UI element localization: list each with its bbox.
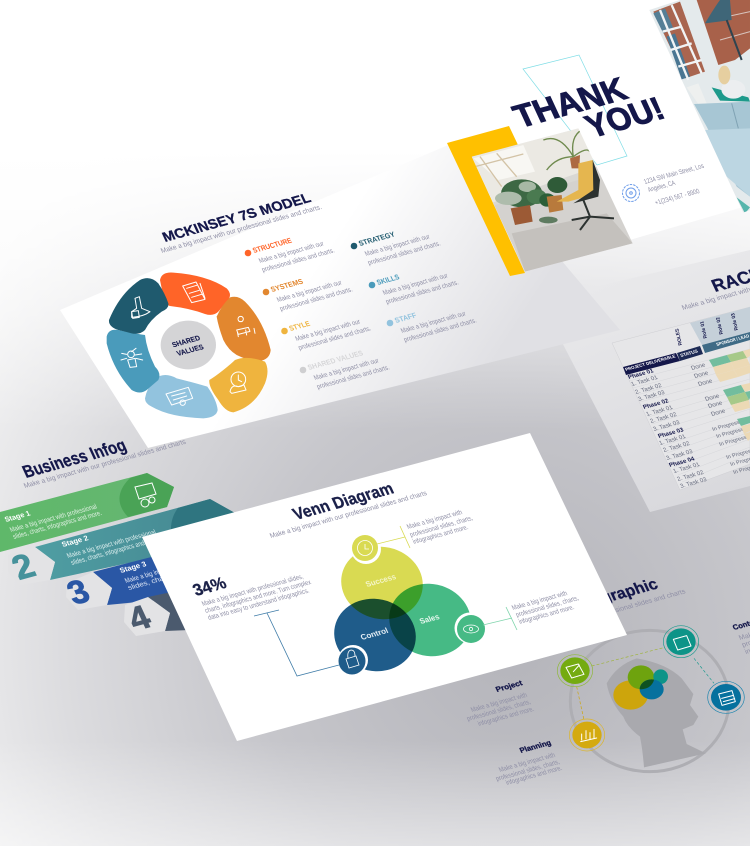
- text: project description: [466, 692, 536, 728]
- heading: infographic: Infographic: [570, 576, 661, 615]
- heading: thank you: YOU!: [579, 90, 670, 144]
- stage 2 bar: 2: [6, 547, 41, 587]
- heading: thank you: THANK: [507, 70, 633, 134]
- text: sales description: professional slides, charts,: [515, 595, 580, 619]
- table: Phase 03: [657, 427, 685, 440]
- table: Phase 01: [627, 368, 655, 381]
- icon: clock: [351, 534, 381, 564]
- node: teal content: [663, 626, 699, 658]
- label: success: Success: [364, 572, 398, 589]
- panel: RACI slide: [540, 250, 750, 512]
- item: skills: professional slides and charts.: [385, 280, 460, 306]
- petal: style: [209, 358, 267, 412]
- subtitle: business infographic: Make a big impact with our professional slides and charts: [23, 439, 188, 490]
- table: Done: [704, 393, 721, 403]
- table: 1. Task 01: [645, 405, 675, 418]
- contact details: +1(234) 567 - 8900: [654, 188, 701, 207]
- stage 2 bar: [6, 499, 235, 587]
- item: shared values: Make a big impact with our: [313, 358, 381, 382]
- item: systems: professional slides and charts.: [279, 287, 354, 313]
- stage 3 bar: 3: [61, 573, 96, 612]
- item: skills: SKILLS: [375, 273, 401, 287]
- table: In Progress: [718, 435, 748, 448]
- text: project description: professional slides, charts,: [466, 699, 532, 723]
- head diagram: [570, 630, 729, 772]
- petal: strategy: [109, 278, 168, 334]
- table: PROJECT DELIVERABLE: [624, 354, 676, 372]
- outline rectangle: [523, 55, 627, 165]
- node: blue: [708, 681, 744, 713]
- stage 1 bar: Stage 1: [3, 509, 32, 524]
- item: staff: Make a big impact with our: [400, 311, 468, 335]
- item: style: professional slides and charts.: [297, 326, 372, 352]
- item: shared values: [300, 349, 391, 391]
- table: In Progress: [715, 427, 745, 440]
- text: sales description: [511, 590, 580, 626]
- stat: 34%: 34%: [190, 574, 229, 600]
- item: strategy: Make a big impact with our: [364, 234, 432, 258]
- center: shared values: [161, 321, 216, 369]
- table: Role 03: [730, 312, 740, 331]
- label: sales: Sales: [418, 612, 442, 626]
- table: 2. Task 02: [662, 441, 692, 454]
- node: yellow planning: [569, 719, 605, 751]
- table: 1. Task 01: [658, 434, 688, 447]
- table: ROLES: [674, 327, 684, 346]
- stage 4 bar: [122, 588, 190, 638]
- table: Done: [693, 370, 710, 380]
- label: control: Control: [359, 626, 390, 642]
- item: staff: [387, 311, 478, 344]
- item: style: [281, 319, 372, 352]
- subtitle: venn: Make a big impact with our professional slides and charts: [269, 490, 429, 540]
- text: content description: [738, 620, 750, 656]
- item: structure: STRUCTURE: [251, 236, 293, 255]
- table: 1. Task 01: [672, 462, 702, 475]
- contact details: Angeles, CA: [647, 180, 677, 194]
- item: strategy: [351, 230, 442, 267]
- contact details: [643, 163, 706, 207]
- item: style: STYLE: [288, 319, 312, 333]
- text: stat description: Make a big impact with professional slides,: [201, 574, 305, 608]
- text: project description: Make a big impact with: [470, 692, 529, 714]
- contact details: 1234 SW Main Street, Los: [643, 163, 706, 186]
- stage 3 bar: slides, charts, infographics: [127, 561, 219, 592]
- petal: systems: [217, 297, 271, 361]
- venn circles: [327, 539, 478, 679]
- stage 2 bar: slides, charts, infographics and more.: [70, 536, 161, 567]
- table: 3. Task 03: [652, 420, 682, 433]
- item: skills: [369, 273, 460, 306]
- table: Phase 04: [668, 456, 696, 469]
- icon: lock: [338, 645, 368, 675]
- stage 1 bar: [0, 473, 174, 552]
- table: 2. Task 02: [676, 470, 706, 483]
- item: structure: Make a big impact with our: [258, 241, 326, 265]
- connector: success: [377, 526, 410, 548]
- center: shared values: VALUES: [175, 342, 205, 358]
- subtitle: infographic: Make a big impact with our professional slides and charts: [514, 588, 687, 642]
- text: stat description: [201, 574, 313, 622]
- item: systems: Make a big impact with our: [276, 280, 344, 304]
- text: sales description: infographics and more.: [518, 604, 576, 626]
- yellow frame: [447, 126, 525, 276]
- petal: structure: [160, 273, 230, 315]
- stage 2 bar: Make a big impact with professional: [66, 529, 158, 560]
- panel: thank you slide: [447, 0, 750, 276]
- item: staff: STAFF: [393, 311, 418, 325]
- text: success description: infographics and more.: [412, 524, 470, 546]
- panel: venn diagram slide: [142, 433, 627, 741]
- text: stat description: charts, infographics and more. Turn complex: [204, 579, 313, 615]
- heading: McKinsey 7S model: MCKINSEY 7S MODEL: [160, 189, 314, 245]
- connector: control: [254, 610, 339, 676]
- item: structure: [245, 236, 336, 274]
- table: Done: [697, 378, 714, 388]
- table: Done: [690, 362, 707, 372]
- text: planning description: infographics and more.: [505, 765, 564, 787]
- item: skills: Make a big impact with our: [382, 273, 450, 297]
- center: shared values: SHARED: [170, 333, 202, 349]
- panel: McKinsey 7S slide: [60, 140, 620, 448]
- table: Role 01: [699, 320, 709, 339]
- subtitle: RACI: Make a big impact with: [681, 287, 750, 312]
- text: success description: [406, 509, 474, 546]
- table: In Progress: [711, 420, 741, 433]
- icon: eye: [454, 612, 486, 644]
- stage 3 bar: Make a big impact with professional: [124, 554, 216, 585]
- item: strategy: STRATEGY: [357, 230, 396, 248]
- table: Phase 02: [642, 398, 670, 411]
- stage 3 bar: Stage 3: [118, 559, 148, 575]
- item: systems: SYSTEMS: [269, 277, 305, 294]
- table: 3. Task 03: [665, 449, 695, 462]
- subtitle: McKinsey: Make a big impact with our professional slides and charts.: [160, 204, 323, 255]
- table: Role 02: [715, 316, 725, 335]
- item: strategy: professional slides and charts.: [367, 241, 442, 267]
- label: planning: Planning: [518, 738, 553, 755]
- heading: thank you: [507, 70, 670, 144]
- item: shared values: professional slides and charts.: [316, 365, 391, 391]
- item: shared values: SHARED VALUES: [306, 349, 365, 372]
- wheel diagram: [107, 273, 271, 418]
- table: 1. Task 01: [630, 375, 660, 388]
- table: Done: [710, 408, 727, 418]
- heading: business infographic: Business Infog: [19, 435, 129, 482]
- item: staff: professional slides and charts.: [403, 318, 478, 344]
- stage 4 bar: 4: [122, 599, 157, 638]
- stage 3 bar: [61, 553, 219, 612]
- icon: gear: [622, 184, 640, 202]
- text: planning description: professional slides, charts,: [495, 759, 561, 783]
- stage 1 bar: slides, charts, infographics and more.: [12, 510, 103, 541]
- label: project: Project: [494, 678, 524, 694]
- table: 2. Task 02: [649, 412, 679, 425]
- text: sales description: Make a big impact with: [511, 590, 569, 612]
- table: 3. Task 03: [637, 390, 667, 403]
- heading: venn diagram: Venn Diagram: [290, 479, 397, 524]
- table: Done: [707, 400, 724, 410]
- node: green project: [557, 655, 593, 687]
- item: systems: [263, 277, 354, 313]
- text: success description: professional slides, charts,: [409, 515, 474, 539]
- stage 1 bar: Make a big impact with professional: [9, 503, 99, 534]
- text: stat description: data into easy to understand infographics.: [207, 588, 311, 622]
- item: structure: professional slides and charts.: [261, 248, 336, 274]
- panel: business infographic slide: [0, 435, 235, 638]
- photo: plants and chair: [470, 127, 637, 273]
- photo: living room: [647, 0, 750, 213]
- petal: staff: [107, 330, 159, 392]
- text: planning description: Make a big impact with: [498, 752, 557, 774]
- item: style: Make a big impact with our: [294, 319, 362, 343]
- table: [612, 307, 750, 490]
- text: success description: Make a big impact with: [406, 509, 464, 531]
- petal: skills: [145, 375, 218, 418]
- text: project description: infographics and more.: [477, 706, 536, 728]
- connector: sales: [483, 607, 517, 630]
- table: 2. Task 02: [634, 383, 664, 396]
- table: STATUS: [679, 349, 699, 358]
- table: 3. Task 03: [679, 477, 709, 490]
- panel: brain infographic slide: [466, 576, 750, 787]
- stage 2 bar: Stage 2: [60, 533, 90, 549]
